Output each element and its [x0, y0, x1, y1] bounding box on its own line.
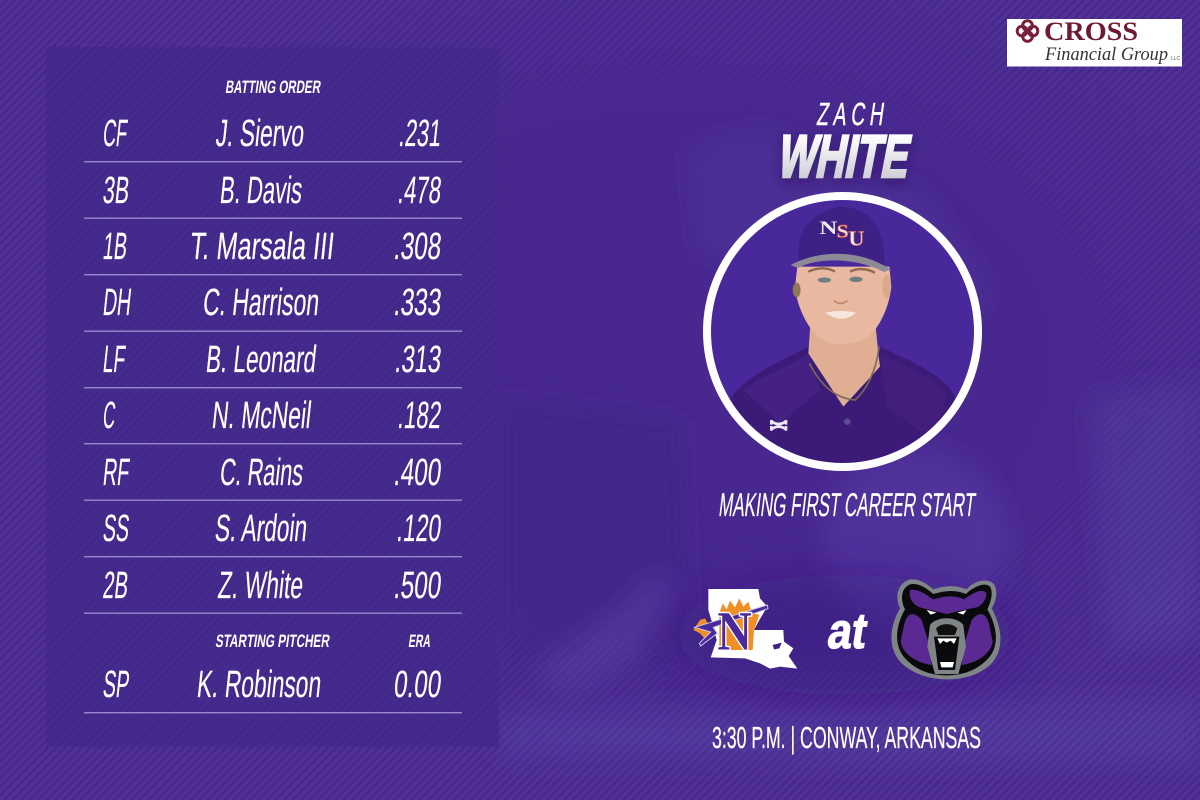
mouth	[934, 637, 959, 670]
row: 2B: .500	[392, 565, 443, 607]
logo: Northwestern State	[693, 589, 797, 669]
row: SP: SP	[101, 664, 131, 706]
wordmark: Financial Group: Financial Group	[1044, 44, 1168, 65]
row: LF	[84, 339, 462, 388]
row: DH	[84, 282, 462, 332]
row: 2B	[84, 565, 462, 614]
heading: starting pitcher: STARTING PITCHER	[214, 631, 331, 651]
row: SS: S. Ardoin	[213, 508, 309, 550]
player first name: ZACH	[815, 96, 891, 132]
row: RF: RF	[101, 452, 131, 494]
icon: cross knot	[1017, 21, 1038, 41]
outer grey outline	[891, 579, 1000, 679]
cap logo	[820, 222, 864, 246]
player photo	[707, 196, 978, 490]
row: C: C	[101, 395, 117, 437]
row: SP	[84, 664, 462, 713]
purple right cheek	[962, 614, 993, 665]
row: RF	[84, 452, 462, 501]
purple left cheek	[901, 614, 932, 665]
row: 1B	[84, 226, 462, 275]
row: SP: 0.00	[392, 664, 443, 706]
face	[795, 267, 891, 344]
heading: batting order: BATTING ORDER	[224, 77, 322, 97]
row: 1B: T. Marsala III	[188, 226, 336, 268]
row: 2B: Z. White	[216, 565, 305, 607]
letter N: N	[717, 601, 752, 662]
row: C	[84, 395, 462, 444]
row: RF: .400	[392, 452, 443, 494]
cap logo: S	[837, 221, 849, 242]
row: SS: .120	[395, 508, 443, 550]
game time and location: 3:30 P.M. | CONWAY, ARKANSAS	[712, 720, 981, 755]
row: DH: DH	[101, 282, 133, 324]
row: 3B: B. Davis	[218, 170, 304, 212]
row: C: N. McNeil	[210, 395, 313, 437]
row: CF	[84, 113, 462, 162]
row: 3B: .478	[396, 170, 443, 212]
logo glow	[675, 575, 1015, 695]
panel: batting order	[46, 47, 499, 747]
row: 1B: 1B	[101, 226, 129, 268]
row: CF: .231	[397, 113, 443, 155]
neck	[808, 320, 880, 407]
wordmark: LLC: LLC	[1171, 56, 1181, 62]
row: LF: B. Leonard	[204, 339, 318, 381]
under armour mark	[771, 420, 787, 431]
row: SS: SS	[101, 508, 131, 550]
flames	[719, 598, 759, 650]
fangs	[937, 638, 957, 644]
row: C: .182	[396, 395, 443, 437]
black head	[897, 584, 996, 675]
bayou notch	[773, 643, 782, 649]
row: 2B: 2B	[101, 565, 130, 607]
row: DH: .333	[392, 282, 443, 324]
row: RF: C. Rains	[218, 452, 305, 494]
row: 3B	[84, 170, 462, 219]
row: CF: CF	[101, 113, 129, 155]
row: LF: .313	[393, 339, 443, 381]
row: SP: K. Robinson	[195, 664, 323, 706]
muzzle	[927, 618, 966, 674]
row: 1B: .308	[392, 226, 443, 268]
row: 3B: 3B	[101, 170, 131, 212]
row: CF: J. Siervo	[214, 113, 306, 155]
row: DH: C. Harrison	[201, 282, 321, 324]
eyes	[927, 610, 967, 615]
logo: Cross Financial Group	[1007, 17, 1182, 66]
row: LF: LF	[101, 339, 127, 381]
player last name: WHITE	[773, 123, 917, 190]
arrow	[695, 605, 768, 646]
wordmark: CROSS: CROSS	[1044, 17, 1138, 46]
purple ears and forehead	[910, 590, 986, 614]
jersey	[730, 346, 955, 463]
Louisiana outline	[708, 589, 797, 669]
versus "at": at	[824, 602, 871, 659]
row: SS	[84, 508, 462, 557]
cap logo: N	[819, 218, 837, 239]
logo: Central Arkansas bear	[891, 579, 1000, 679]
heading: ERA: ERA	[407, 631, 432, 651]
cap logo: U	[848, 228, 864, 250]
cap	[798, 207, 885, 269]
